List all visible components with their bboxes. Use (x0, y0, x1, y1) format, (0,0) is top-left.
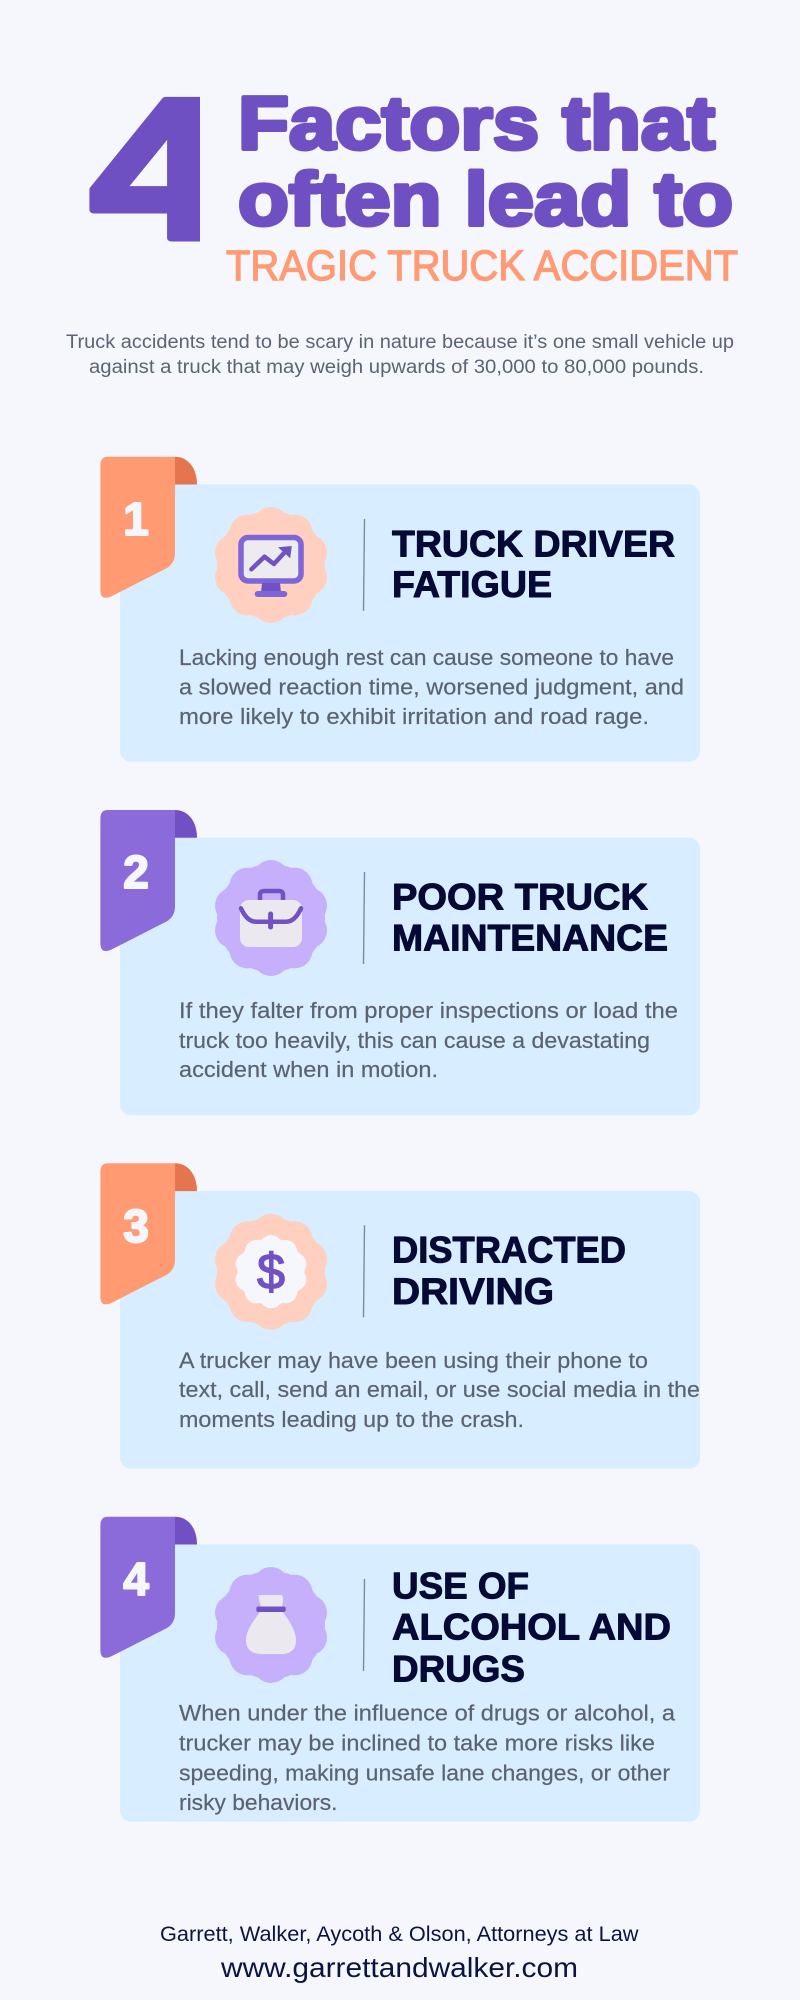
panel: poor truck maintenance (100, 810, 700, 1115)
card background (120, 1191, 700, 1469)
divider (364, 519, 365, 611)
body text: accident when in motion. (179, 1057, 438, 1082)
body text (179, 645, 684, 729)
panel: distracted driving (100, 1163, 700, 1469)
body text: When under the influence of drugs or alcohol, a (179, 1701, 676, 1726)
intro text: against a truck that may weigh upwards of 30,000 to 80,000 pounds. (89, 357, 704, 378)
ribbon with number 2 (100, 810, 197, 951)
ribbon with number 1: 1 (123, 493, 149, 545)
icon: dollar badge (215, 1214, 327, 1330)
body text: speeding, making unsafe lane changes, or other (179, 1761, 671, 1786)
body text: If they falter from proper inspections or load the (179, 998, 678, 1023)
heading: DRUGS (392, 1648, 525, 1690)
body text: Lacking enough rest can cause someone to have (179, 645, 674, 670)
heading: ALCOHOL AND (392, 1606, 671, 1647)
intro text: Truck accidents tend to be scary in nature because it’s one small vehicle up (66, 332, 734, 353)
heading: DISTRACTED (392, 1230, 626, 1271)
ribbon with number 3: 3 (123, 1200, 149, 1252)
body text: risky behaviors. (179, 1790, 338, 1815)
heading: MAINTENANCE (392, 918, 668, 958)
card background (120, 1544, 700, 1822)
heading: DRIVING (392, 1271, 554, 1312)
footer (160, 1923, 639, 1983)
big numeral 4: 4 (90, 58, 228, 281)
heading (392, 1565, 671, 1690)
heading (392, 524, 675, 605)
heading: FATIGUE (392, 564, 552, 605)
body text: moments leading up to the crash. (179, 1407, 524, 1432)
ribbon with number 4: 4 (123, 1553, 149, 1605)
divider (364, 872, 365, 964)
body text (179, 998, 678, 1082)
ribbon with number 1 (100, 457, 197, 598)
divider (364, 1579, 365, 1671)
heading (392, 876, 668, 958)
subtitle: TRAGIC TRUCK ACCIDENT (226, 242, 738, 290)
panel: truck driver fatigue (100, 457, 700, 762)
firm name: Garrett, Walker, Aycoth & Olson, Attorneys at Law (160, 1923, 639, 1946)
icon: sack (215, 1567, 327, 1683)
icon: monitor with rising chart (215, 507, 327, 623)
heading: TRUCK DRIVER (392, 524, 675, 564)
card background (120, 484, 700, 762)
body text: a slowed reaction time, worsened judgment, and (179, 674, 684, 700)
body text: text, call, send an email, or use social media in the (179, 1377, 700, 1402)
heading: USE OF (392, 1565, 529, 1606)
body text (179, 1348, 700, 1432)
body text: truck too heavily, this can cause a devastating (179, 1028, 650, 1053)
ribbon with number 3 (100, 1163, 197, 1304)
title block (89, 92, 738, 282)
divider (364, 1225, 365, 1317)
icon: dollar badge: $ (257, 1244, 285, 1300)
title line 1: Factors that (238, 81, 715, 165)
website: www.garrettandwalker.com (220, 1952, 578, 1983)
body text (179, 1701, 676, 1815)
ribbon with number 2: 2 (123, 846, 149, 898)
heading (392, 1230, 626, 1312)
ribbon with number 4 (100, 1517, 197, 1658)
panel: use of alcohol and drugs (100, 1517, 700, 1822)
heading: POOR TRUCK (392, 876, 648, 918)
body text: more likely to exhibit irritation and road rage. (179, 704, 649, 729)
card background (120, 838, 700, 1115)
intro text (66, 332, 734, 378)
icon: briefcase (215, 860, 327, 976)
title line 2: often lead to (238, 157, 733, 241)
body text: A trucker may have been using their phone to (179, 1348, 648, 1373)
body text: trucker may be inclined to take more risks like (179, 1731, 655, 1756)
